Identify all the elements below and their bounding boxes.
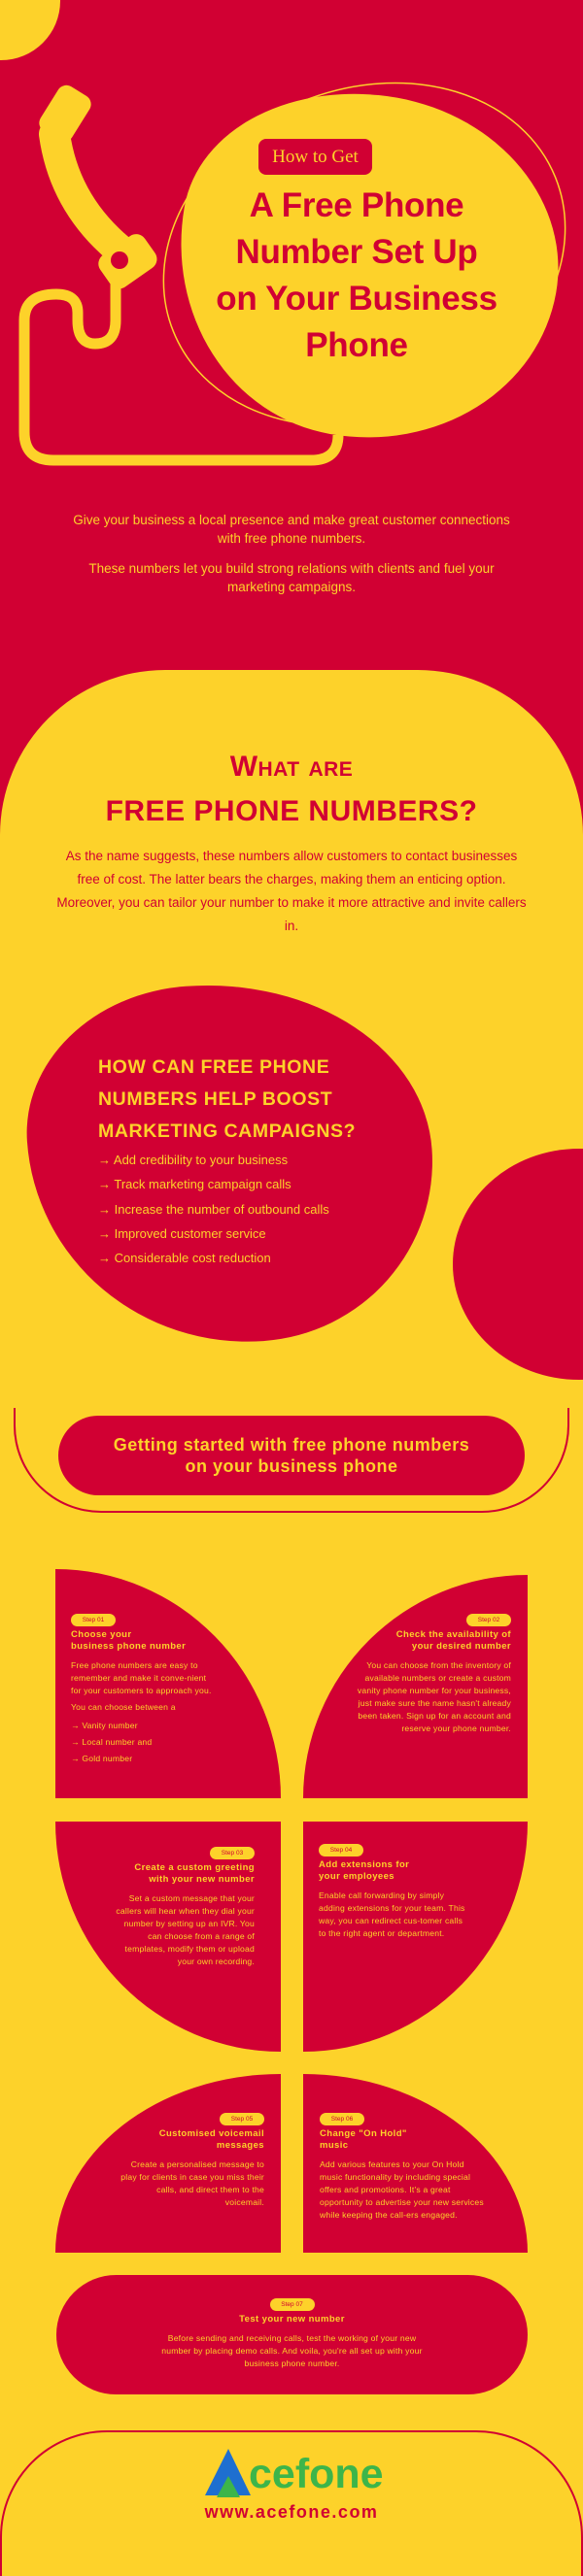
decorative yellow corner circle [0, 0, 60, 60]
card: step 04: Enable call forwarding by simply adding extensions for your team. This way, you can redirect cus-tomer calls to the right agent or department. [319, 1890, 465, 1938]
outline ellipse [112, 24, 583, 485]
panel text: benefits [98, 1056, 356, 1265]
red top background [0, 0, 583, 971]
banner: getting started: on your business phone [185, 1456, 398, 1476]
card: step 07: Test your new number [239, 2314, 345, 2325]
card: step 04: your employees [319, 1871, 394, 1882]
card: step 01: Free phone numbers are easy to remember and make it conve-nient for your customers to approach you. [71, 1660, 212, 1695]
decorative outer curve [14, 1408, 569, 1513]
card: step 06: Change "On Hold" [320, 2128, 407, 2139]
title [216, 186, 497, 364]
intro text: These numbers let you build strong relations with clients and fuel your marketing campaigns. [88, 561, 495, 594]
card: step 01: → Vanity number [71, 1721, 138, 1730]
logo: acefone: cefone [249, 2451, 384, 2497]
card: step 01: → Local number and [71, 1737, 152, 1747]
panel text: benefits: → Considerable cost reduction [98, 1251, 271, 1265]
panel text: benefits: MARKETING CAMPAIGNS? [98, 1121, 356, 1142]
icon: phone handset with cord [19, 82, 566, 466]
title: A Free Phone [250, 186, 463, 224]
card: step 05: Step 05 [231, 2116, 253, 2123]
title: on Your Business [216, 280, 497, 318]
card: step 01: You can choose between a [71, 1702, 176, 1712]
panel text: benefits: → Add credibility to your business [98, 1153, 288, 1167]
tag: How to Get [258, 139, 372, 175]
panel text: benefits: NUMBERS HELP BOOST [98, 1088, 332, 1110]
heading: what are free phone numbers: What are [230, 751, 353, 783]
card: step 02: Step 02 [478, 1617, 499, 1623]
title blob [150, 65, 583, 468]
panel text: benefits: → Increase the number of outbound calls [98, 1202, 329, 1217]
card: step 01: → Gold number [71, 1754, 132, 1763]
card: step 06: Step 06 [331, 2116, 353, 2123]
card: step 07: Before sending and receiving calls, test the working of your new number by placing demo calls. And voila, you're all set up with your business phone number. [161, 2333, 423, 2368]
card: step 02 [303, 1575, 528, 1798]
card: step 01: business phone number [71, 1641, 186, 1652]
card: step 05: Customised voicemail [159, 2128, 264, 2139]
card: step 03: Step 03 [222, 1850, 243, 1857]
card: step 03: with your new number [149, 1874, 255, 1885]
card: step 04: Step 04 [330, 1847, 352, 1854]
tag: How to Get: How to Get [272, 147, 359, 167]
card: step 06 [303, 2074, 528, 2253]
card: step 07: Step 07 [281, 2301, 303, 2308]
card: step 05: Create a personalised message to play for clients in case you miss their calls, and direct them to the voicemail. [120, 2159, 264, 2207]
card: step 06: Add various features to your On Hold music functionality by including special offers and promotions. It's a great opportunity to advertise your new services while keeping the call-ers engaged. [320, 2159, 484, 2220]
title: Number Set Up [236, 233, 477, 271]
intro text: Give your business a local presence and make great customer connections with free phone numbers. [73, 513, 510, 546]
card: step 05: messages [217, 2140, 264, 2151]
heading: what are free phone numbers: FREE PHONE NUMBERS? [106, 795, 477, 827]
card: step 01 [55, 1569, 281, 1798]
panel: marketing benefits blob [17, 970, 444, 1356]
card: step 01: Choose your [71, 1629, 131, 1640]
banner: getting started: Getting started with free phone numbers [114, 1435, 469, 1455]
card: step 07 [56, 2275, 528, 2394]
card: step 02: Check the availability of [396, 1629, 511, 1640]
card: step 04 [303, 1822, 528, 2052]
paragraph: definition: As the name suggests, these numbers allow customers to contact businesses free of cost. The latter bears the charges, making them an enticing option. Moreover, you can tailor your number to make it more attractive and invite callers in. [56, 849, 527, 933]
decorative right half circle [453, 1149, 583, 1380]
card: step 03 [55, 1822, 281, 2052]
heading: what are free phone numbers [106, 751, 477, 827]
card: step 02: your desired number [412, 1641, 511, 1652]
card: step 01: Step 01 [83, 1617, 104, 1623]
decorative footer arc [0, 2430, 583, 2576]
card: step 02: You can choose from the inventory of available numbers or create a custom vanity phone number for your business, just make sure the name hasn't already been taken. Sign up for an account and reserve your phone number. [358, 1660, 511, 1733]
card: step 04: Add extensions for [319, 1859, 409, 1870]
banner: getting started [58, 1416, 525, 1495]
panel text: benefits: HOW CAN FREE PHONE [98, 1056, 329, 1078]
intro text [73, 513, 510, 594]
footer url: www.acefone.com [205, 2502, 378, 2522]
panel text: benefits: → Improved customer service [98, 1226, 266, 1241]
card: step 03: Create a custom greeting [134, 1862, 255, 1873]
card: step 06: music [320, 2140, 348, 2151]
panel text: benefits: → Track marketing campaign calls [98, 1177, 292, 1191]
card: step 05 [55, 2074, 281, 2253]
title: Phone [305, 326, 408, 364]
card: step 03: Set a custom message that your callers will hear when they dial your number by setting up an IVR. You can choose from a range of templates, modify them or upload your own recording. [116, 1893, 255, 1966]
yellow lower background [0, 670, 583, 2538]
